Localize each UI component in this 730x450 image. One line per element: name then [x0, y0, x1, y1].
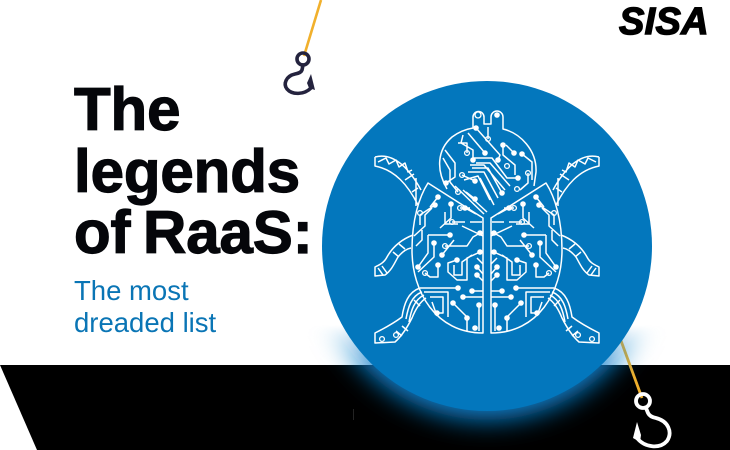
body shell: [412, 183, 483, 333]
bug head: [440, 111, 536, 214]
upper leg: [375, 156, 421, 206]
logo: SISA: SISA: [619, 1, 709, 43]
title: [74, 76, 313, 266]
bug left half: [375, 156, 483, 343]
title: The: [74, 76, 180, 143]
lower leg: [375, 288, 426, 343]
lower circuit traces: [420, 258, 483, 331]
bottom fishing line: [620, 338, 642, 398]
circle glow: [324, 328, 650, 441]
small mark on band: [352, 409, 354, 420]
blue circle: [322, 81, 652, 411]
subtitle: dreaded list: [74, 307, 216, 338]
black band: [0, 365, 730, 450]
icon: circuit bug: [375, 111, 599, 343]
bottom hook: [633, 394, 670, 446]
subtitle: [74, 275, 216, 338]
top fishing line: [304, 0, 321, 56]
title: of RaaS:: [74, 199, 313, 266]
middle leg: [375, 235, 413, 276]
title: legends: [74, 138, 300, 204]
top hook: [285, 53, 315, 93]
upper circuit traces: [414, 197, 483, 280]
circuit nodes: [415, 194, 483, 331]
subtitle: The most: [74, 275, 189, 306]
bug right half: [491, 156, 599, 343]
